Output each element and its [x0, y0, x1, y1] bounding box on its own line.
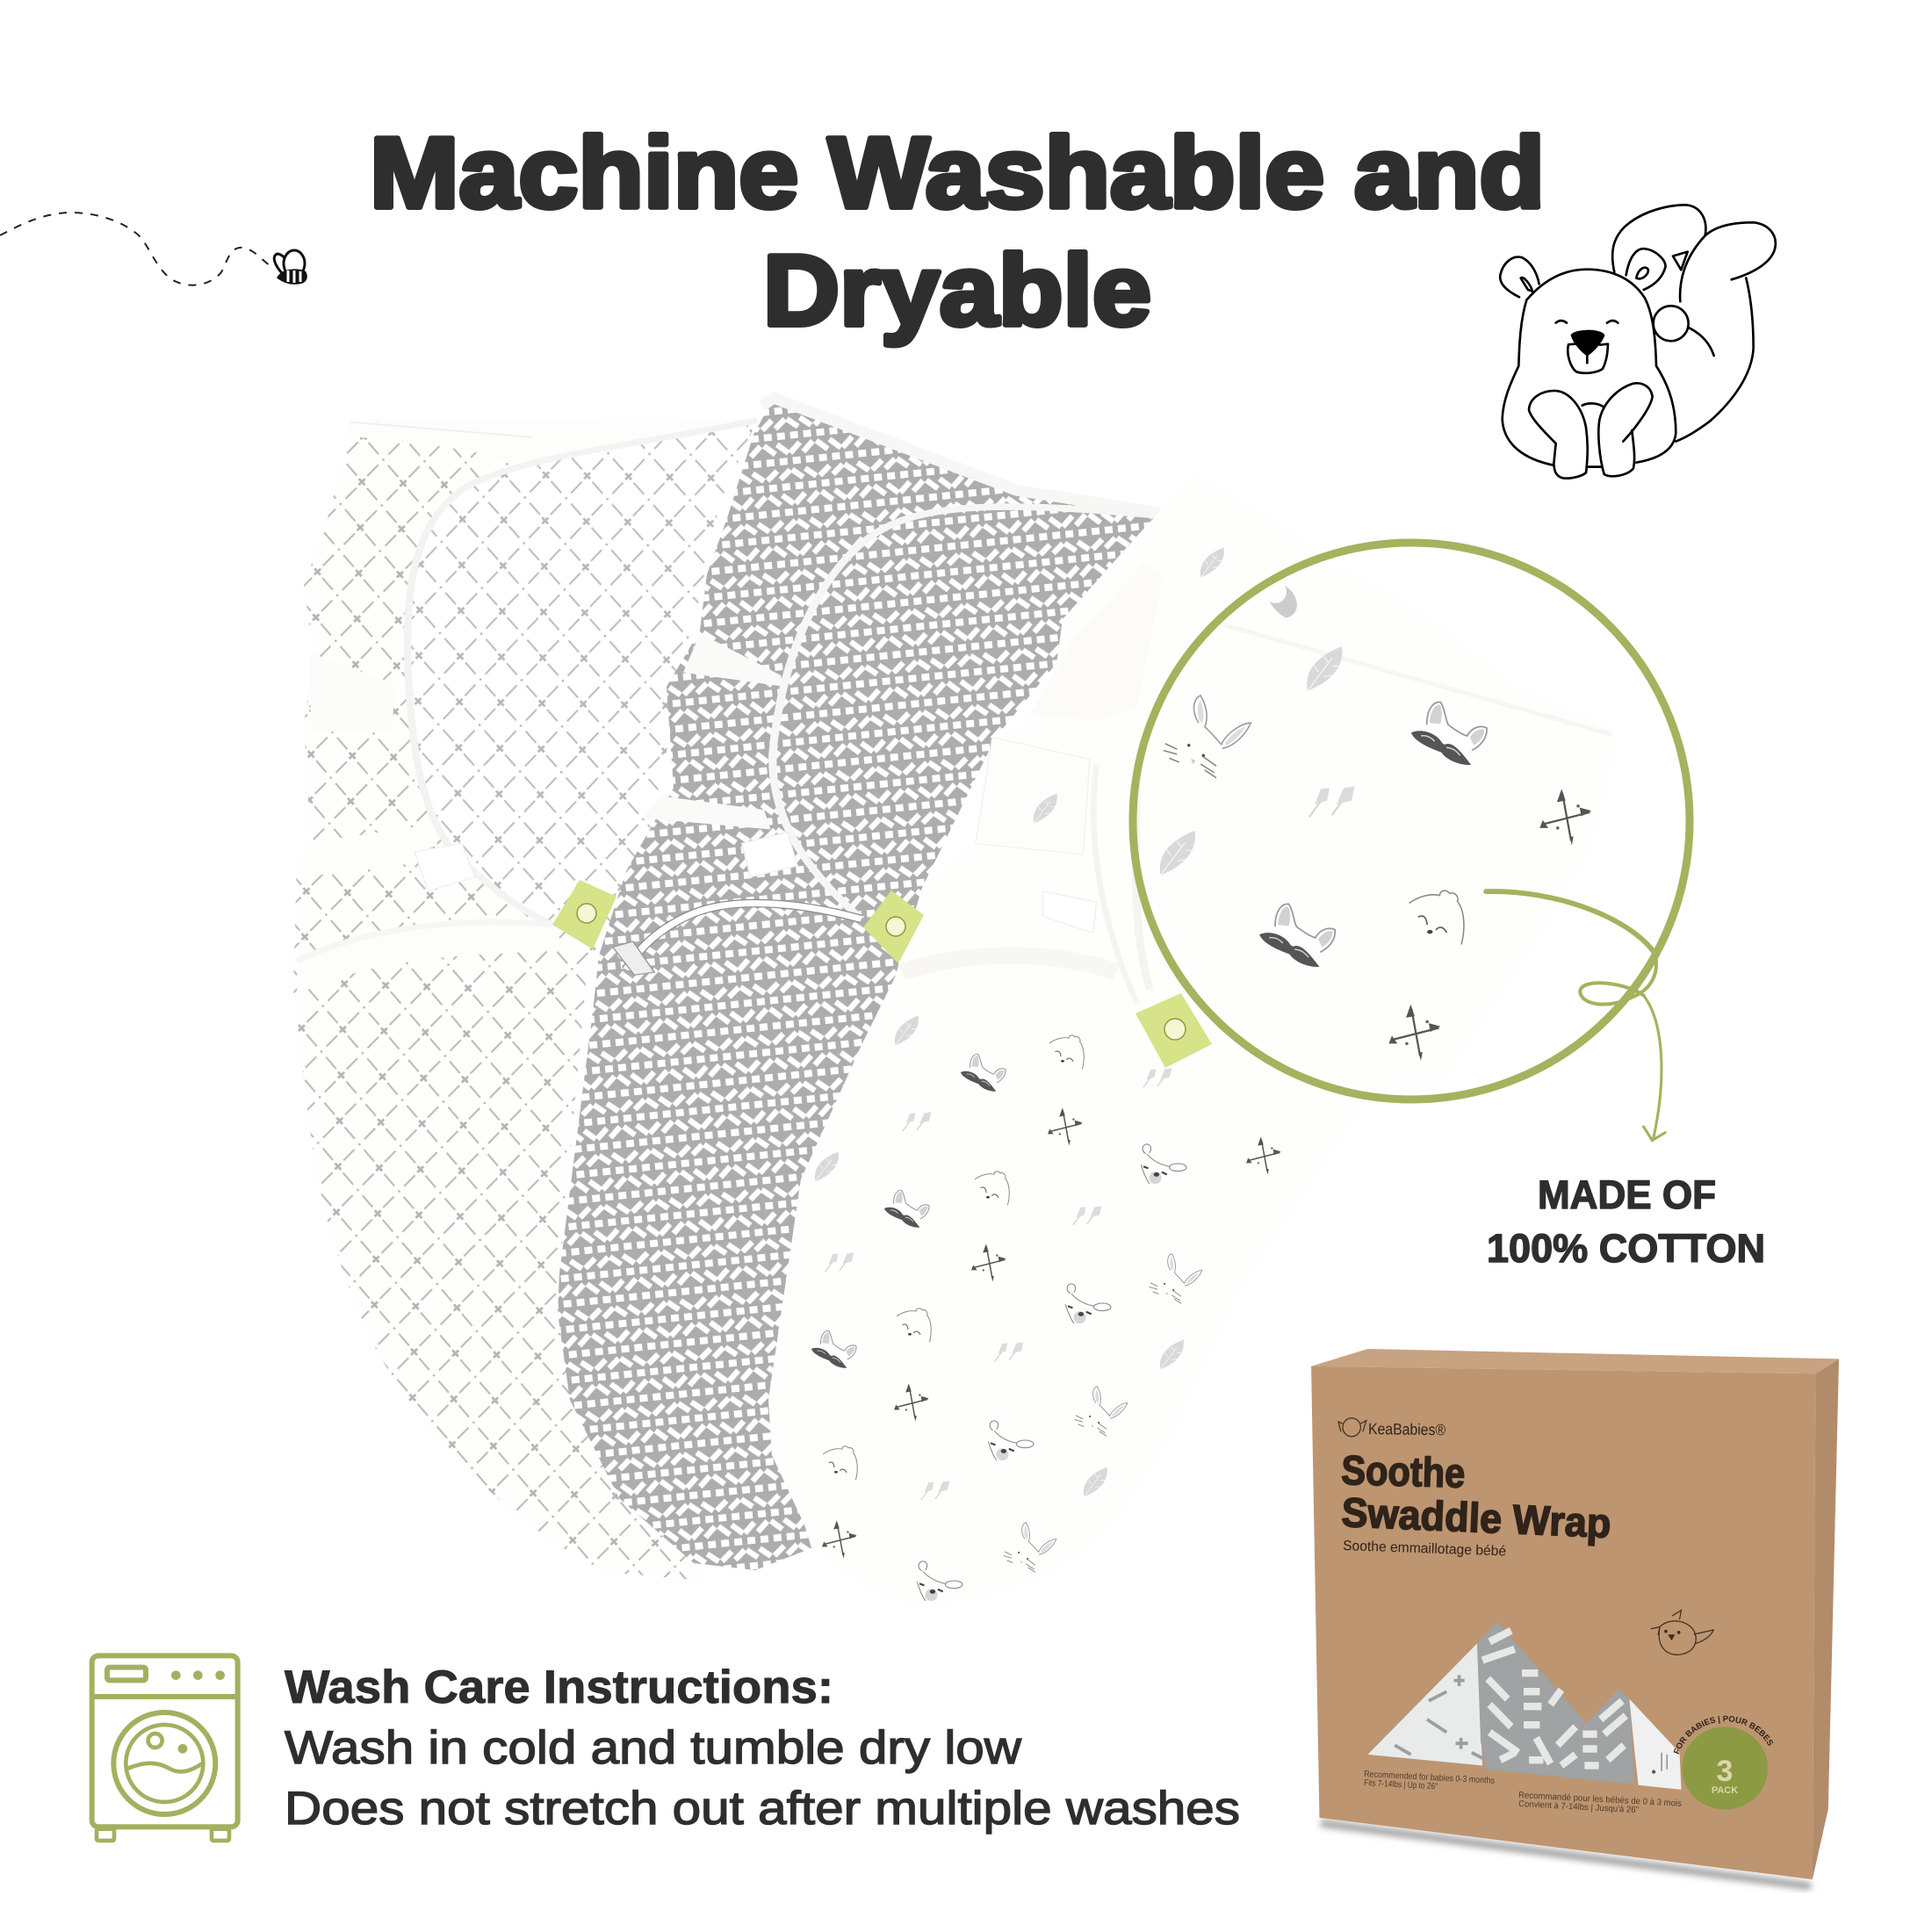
arrow: curly green — [1486, 891, 1665, 1141]
wash care text: Wash Care Instructions: — [285, 1662, 833, 1713]
box text: PACK — [1712, 1785, 1738, 1796]
bee flight path — [0, 213, 306, 285]
box text — [1341, 1420, 1773, 1815]
box text: Soothe — [1341, 1446, 1466, 1496]
icon: bear mascot — [1500, 205, 1776, 479]
box text: Soothe emmaillotage bébé — [1343, 1539, 1506, 1559]
box text: Convient à 7-14lbs | Jusqu'à 26" — [1518, 1799, 1640, 1815]
callout: 100% cotton — [1487, 1172, 1765, 1271]
box shape — [1311, 1349, 1839, 1879]
callout: 100% cotton: 100% COTTON — [1487, 1226, 1765, 1271]
box text: Recommended for babies 0-3 months — [1364, 1770, 1495, 1786]
box text: Fits 7-14lbs | Up to 26" — [1364, 1778, 1438, 1791]
wash care text — [285, 1662, 1240, 1835]
wash care text: Does not stretch out after multiple washes — [285, 1783, 1240, 1835]
title: Machine Washable and — [370, 118, 1545, 229]
icon: bird doodle — [1651, 1611, 1713, 1654]
swaddle: diamond print — [293, 419, 757, 1581]
icon: washing machine — [92, 1655, 238, 1841]
title — [370, 118, 1545, 347]
box text: Recommandé pour les bébés de 0 à 3 mois — [1518, 1791, 1682, 1809]
wash care text: Wash in cold and tumble dry low — [285, 1722, 1022, 1774]
animal swaddle fold details — [902, 563, 1164, 1003]
box text: KeaBabies® — [1368, 1420, 1445, 1438]
swaddle: grey print — [558, 398, 1160, 1570]
box shadow — [1321, 1823, 1811, 1886]
brand tags — [552, 880, 1212, 1068]
flap pattern — [407, 421, 757, 955]
zoom circle: cotton close-up — [1133, 543, 1690, 1099]
icon: brand chick — [1338, 1418, 1366, 1437]
box window — [1368, 1621, 1682, 1790]
box text: 3 — [1717, 1755, 1733, 1788]
box text: Swaddle Wrap — [1341, 1489, 1612, 1546]
close-up fabric — [1135, 556, 1618, 1087]
icon: bee — [274, 250, 306, 283]
grey swaddle fold details — [613, 507, 1160, 975]
icon group: small animal print — [811, 548, 1281, 1601]
icon: pack badge — [1682, 1727, 1768, 1810]
title: Dryable — [763, 235, 1151, 347]
swaddle: animal print — [768, 473, 1618, 1604]
swaddle fold details — [297, 419, 757, 995]
product box — [1311, 1349, 1839, 1893]
callout: 100% cotton: MADE OF — [1538, 1172, 1716, 1217]
box text: FOR BABIES | POUR BEBES — [1674, 1716, 1773, 1755]
